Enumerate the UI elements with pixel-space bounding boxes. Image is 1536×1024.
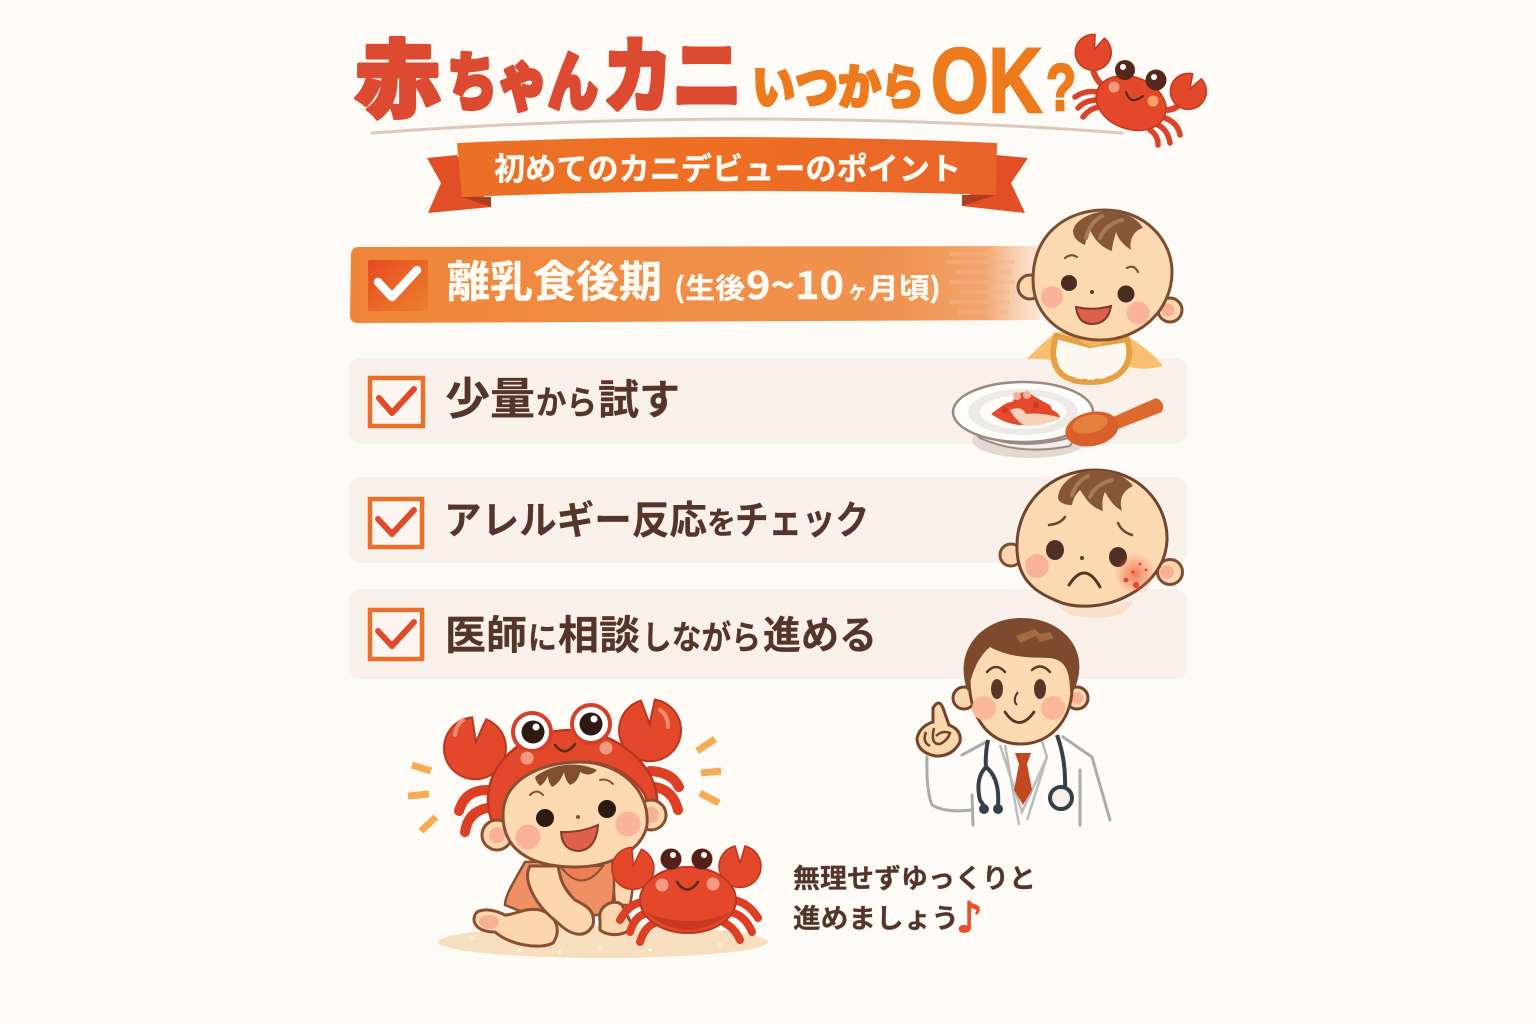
row 3 text: チェック: [735, 490, 869, 546]
icon: doctor pointing finger: [917, 618, 1110, 825]
row 3 text: アレルギー反応: [444, 490, 707, 546]
panel: checklist row 3: [349, 477, 1187, 563]
checkbox 2: [370, 378, 423, 426]
row 1 main text: 離乳食後期: [447, 248, 662, 310]
row 4 text: 進める: [763, 605, 877, 661]
title: ?: [1046, 50, 1076, 124]
row 1 sub text: [674, 255, 941, 310]
checkbox 3: [370, 499, 422, 547]
icon: worried baby with rash: [1000, 470, 1182, 618]
closing message: 無理せずゆっくりと: [793, 857, 1036, 896]
icon: baby in crab hat: [440, 698, 683, 946]
title: カニ: [603, 10, 742, 129]
row 1 sub text: 月頃): [868, 267, 941, 307]
panel: checklist row 4: [349, 589, 1187, 679]
row 4 text: に: [528, 613, 557, 659]
icon: crab food plate with spoon: [953, 382, 1163, 458]
baby head: [482, 762, 666, 867]
ribbon banner: [427, 137, 1028, 213]
banner left tail: [427, 155, 491, 213]
row 1 sub text: ヶ: [848, 273, 867, 305]
title: [355, 10, 1076, 135]
checkbox 4: [370, 610, 422, 659]
closing message: 進めましょう: [793, 897, 959, 936]
row 2 text: 少量: [445, 363, 535, 427]
closing message: [793, 857, 1036, 942]
icon: small crab: [609, 845, 761, 942]
banner right tail: [962, 155, 1028, 213]
title: 赤: [355, 14, 440, 135]
row 1 sub text: (生後: [674, 267, 745, 307]
title: OK: [931, 30, 1042, 132]
row 2 text: から: [536, 376, 597, 424]
row 4 text: [445, 603, 877, 661]
music note: ♪: [956, 893, 983, 942]
icon: title crab: [1070, 30, 1213, 145]
title: いつから: [752, 48, 924, 118]
panel: checklist row 1: [350, 246, 1040, 323]
row 4 text: しながら: [642, 611, 761, 659]
row 3 text: を: [707, 498, 736, 543]
banner text: 初めてのカニデビューのポイント: [494, 144, 961, 189]
row 1 sub text: 9~10: [746, 255, 844, 310]
row 4 text: 相談: [558, 603, 640, 661]
row 2 text: [445, 363, 680, 427]
title underline: [372, 119, 1122, 133]
crab hat: [440, 698, 683, 832]
sparkle marks: [408, 739, 721, 831]
title: ちゃん: [447, 32, 598, 124]
icon: sand ground: [438, 926, 768, 958]
icon: happy baby with bib: [1018, 210, 1182, 382]
row 2 text: 試す: [598, 366, 680, 426]
checkbox 1: [368, 260, 428, 311]
panel: checklist row 2: [349, 358, 1187, 444]
row 3 text: [444, 490, 869, 546]
row 4 text: 医師: [445, 603, 527, 661]
baby body: [474, 860, 633, 946]
